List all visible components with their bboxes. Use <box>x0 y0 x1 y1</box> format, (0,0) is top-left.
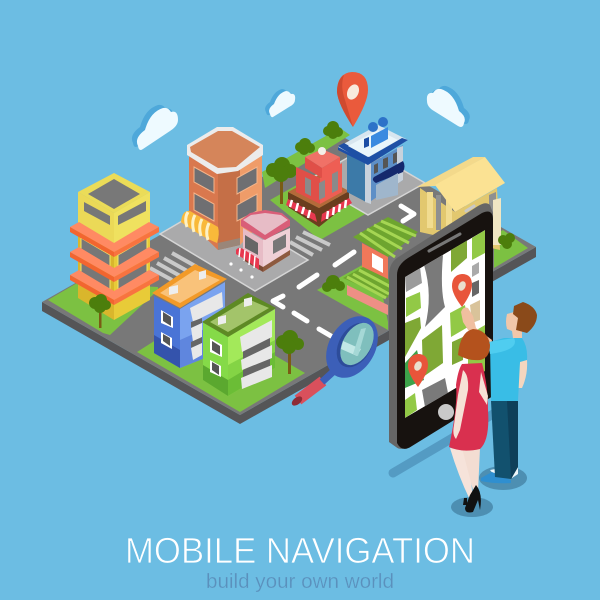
tree beside green apartments <box>276 330 304 374</box>
man <box>461 302 537 490</box>
cloud right <box>427 86 470 127</box>
building: striped garden houses <box>322 217 418 315</box>
building: orange office <box>187 127 263 250</box>
subtitle: build your own world <box>206 571 394 593</box>
building: pink kiosk <box>229 210 290 279</box>
road markings <box>273 206 414 336</box>
city platform <box>42 134 536 424</box>
zebra crossings <box>150 232 330 280</box>
tree beside yellow tower <box>89 294 111 328</box>
phone ground shadow <box>393 410 500 473</box>
cloud middle <box>265 89 295 117</box>
woman <box>449 329 493 517</box>
phone home button <box>438 404 454 420</box>
phone sensor <box>466 206 474 211</box>
tree far right <box>498 233 515 249</box>
map pin: large <box>337 72 368 127</box>
awning: orange office <box>181 211 219 243</box>
title: MOBILE NAVIGATION <box>125 530 475 571</box>
building: blue cinema <box>338 125 408 204</box>
building: yellow house <box>417 157 505 250</box>
building: red shop <box>286 147 352 227</box>
magnifying glass <box>290 307 388 407</box>
building: blue apartments <box>152 264 227 368</box>
pavement: cinema plaza <box>308 148 425 215</box>
phone map screen <box>405 230 485 418</box>
infographic canvas <box>42 72 537 592</box>
building: green apartments <box>202 293 276 396</box>
pin on phone bottom <box>408 354 428 387</box>
building: yellow tower <box>70 173 159 320</box>
smartphone <box>389 203 493 449</box>
pavement: central plaza <box>160 203 308 291</box>
green lots <box>48 128 528 412</box>
pin on phone top <box>452 274 472 307</box>
phone speaker <box>429 234 460 251</box>
trees behind <box>266 121 343 204</box>
icon: film camera on cinema roof <box>364 117 388 148</box>
cloud left <box>132 105 178 150</box>
